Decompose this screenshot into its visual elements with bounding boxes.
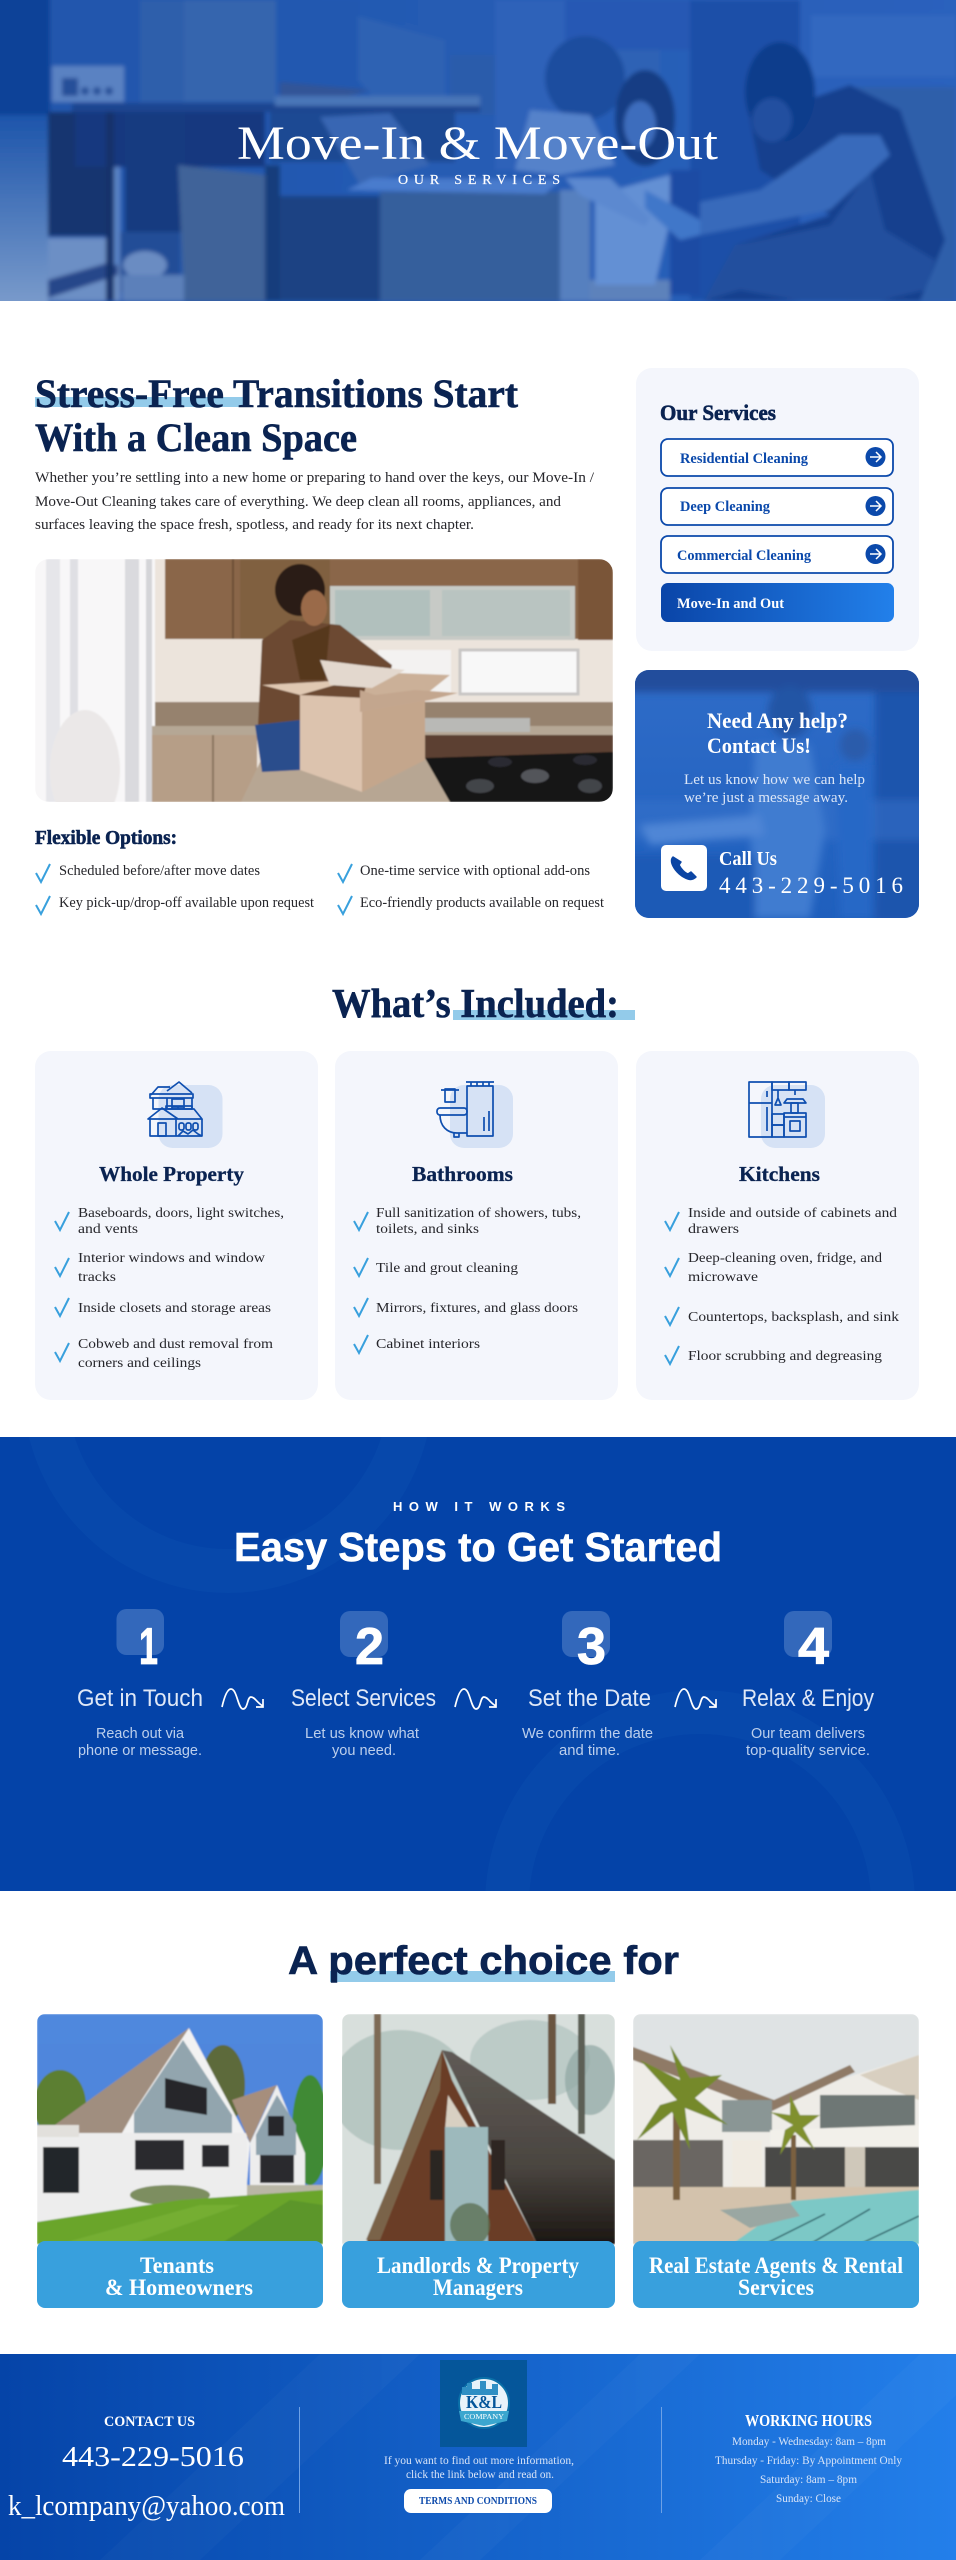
- working hours: Saturday: 8am – 8pm: [760, 2472, 858, 2486]
- item: cabinet interiors: Cabinet interiors: [376, 1337, 480, 1352]
- item: cabinets: Inside and outside of cabinets and: [688, 1206, 897, 1221]
- label bar: Tenants: [140, 2253, 214, 2278]
- included heading: What’s Included:: [332, 980, 619, 1026]
- panel: kitchens: [636, 1051, 919, 1400]
- option: one-time service: One-time service with optional add-ons: [360, 863, 590, 879]
- card: agents: [633, 2014, 919, 2308]
- panel: bathrooms: [335, 1051, 618, 1400]
- step 2: Let us know what: [305, 1726, 419, 1742]
- button: residential cleaning: Residential Cleaning: [680, 451, 808, 467]
- card title: Kitchens: [739, 1162, 820, 1186]
- footer info text: [384, 2453, 574, 2481]
- icon: bathroom: [437, 1082, 494, 1137]
- item: baseboards: [55, 1206, 284, 1237]
- intro heading: [35, 371, 519, 460]
- step 1: [77, 1609, 203, 1759]
- item: sanitization: [354, 1206, 581, 1237]
- intro body text: surfaces leaving the space fresh, spotless, and ready for its next chapter.: [35, 517, 474, 533]
- label bar: [37, 2241, 323, 2308]
- intro body text: Whether you’re settling into a new home or preparing to hand over the keys, our Move-In /: [35, 470, 595, 486]
- item: closets: Inside closets and storage areas: [78, 1301, 271, 1316]
- working hours: [715, 2411, 902, 2505]
- services heading: Our Services: [660, 400, 776, 425]
- panel: contact card: [635, 670, 919, 918]
- perfect choice heading: A perfect choice for: [288, 1939, 679, 1983]
- logo: COMPANY: [464, 2413, 504, 2421]
- label bar: Landlords & Property: [377, 2253, 579, 2278]
- button: commercial cleaning: Commercial Cleaning: [677, 548, 811, 564]
- item: tile: [354, 1258, 518, 1276]
- heading highlight: [330, 1971, 615, 1982]
- contact heading: Need Any help?: [707, 708, 848, 733]
- item: closets: [55, 1298, 271, 1316]
- step 2: [291, 1611, 436, 1759]
- card: tenants: [34, 2014, 328, 2308]
- options heading: Flexible Options:: [35, 827, 177, 849]
- working hours: WORKING HOURS: [745, 2411, 872, 2430]
- intro heading: With a Clean Space: [35, 415, 357, 460]
- item: oven: microwave: [688, 1270, 758, 1285]
- intro body text: [35, 470, 595, 533]
- option: eco-friendly: Eco-friendly products available on request: [360, 895, 604, 911]
- section heading: Easy Steps to Get Started: [234, 1524, 722, 1570]
- step 3: [522, 1611, 653, 1759]
- button: move-in and out: Move-In and Out: [677, 596, 784, 612]
- card: landlords: [330, 2014, 615, 2308]
- panel: whole property: [35, 1051, 318, 1400]
- card title: Bathrooms: [412, 1162, 513, 1186]
- label bar: & Homeowners: [105, 2275, 253, 2300]
- icon: phone: [661, 845, 707, 891]
- terms button: TERMS AND CONDITIONS: [419, 2495, 537, 2507]
- step 1: Reach out via: [96, 1726, 185, 1742]
- section eyebrow: HOW IT WORKS: [393, 1499, 565, 1514]
- item: sanitization: toilets, and sinks: [376, 1222, 479, 1237]
- step 1: Get in Touch: [77, 1685, 203, 1712]
- item: windows: Interior windows and window: [78, 1251, 266, 1266]
- step 4: Our team delivers: [751, 1726, 865, 1742]
- label bar: Real Estate Agents & Rental: [649, 2253, 903, 2278]
- item: floor: Floor scrubbing and degreasing: [688, 1349, 882, 1364]
- label bar: [633, 2241, 919, 2308]
- heading highlight: [453, 1010, 635, 1020]
- call us: 443-229-5016: [719, 873, 903, 898]
- step 2: 2: [355, 1618, 384, 1676]
- label bar: Services: [738, 2275, 814, 2300]
- button: deep cleaning: [661, 488, 893, 525]
- panel: how it works: [0, 1437, 956, 1891]
- contact text: [684, 772, 865, 806]
- panel: our services: [636, 368, 919, 651]
- button: residential cleaning: [661, 439, 893, 476]
- footer contact: 443-229-5016: [62, 2442, 244, 2473]
- arrow: step 3 to 4: [675, 1689, 716, 1709]
- footer info text: click the link below and read on.: [406, 2467, 554, 2481]
- step 1: phone or message.: [78, 1743, 202, 1759]
- perfect choice section: [34, 1939, 919, 2308]
- item: oven: [665, 1251, 882, 1285]
- working hours: Sunday: Close: [776, 2491, 841, 2505]
- label bar: Managers: [433, 2275, 523, 2300]
- terms button: [404, 2489, 552, 2513]
- hero banner: [0, 0, 956, 310]
- item: cabinet interiors: [354, 1335, 480, 1353]
- hero title: Move-In & Move-Out: [237, 117, 719, 170]
- arrow: step 1 to 2: [222, 1689, 263, 1709]
- contact heading: [707, 708, 848, 758]
- photo: suburban house: [34, 2014, 328, 2244]
- item: cobweb: Cobweb and dust removal from: [78, 1337, 273, 1352]
- step 2: Select Services: [291, 1685, 436, 1712]
- footer info text: If you want to find out more information,: [384, 2453, 574, 2467]
- footer contact: k_lcompany@yahoo.com: [8, 2491, 285, 2522]
- step 3: We confirm the date: [522, 1726, 653, 1742]
- working hours: Thursday - Friday: By Appointment Only: [715, 2453, 902, 2467]
- what's included section: [35, 980, 919, 1400]
- step 3: Set the Date: [528, 1685, 651, 1712]
- intro section: [35, 371, 595, 533]
- item: cabinets: drawers: [688, 1222, 739, 1237]
- label bar: [342, 2241, 615, 2308]
- intro heading: Stress-Free Transitions Start: [35, 371, 519, 416]
- item: oven: Deep-cleaning oven, fridge, and: [688, 1251, 882, 1266]
- logo: K&L: [466, 2392, 502, 2412]
- kitchen photo: [44, 559, 613, 802]
- button: deep cleaning: Deep Cleaning: [680, 499, 770, 515]
- item: cobweb: [55, 1337, 273, 1371]
- item: countertops: [665, 1307, 899, 1325]
- footer contact: [8, 2414, 285, 2522]
- photo: a-frame cabin: [330, 2014, 615, 2247]
- logo: [440, 2360, 527, 2447]
- item: cabinets: [665, 1206, 897, 1237]
- button: move-in and out: [661, 583, 894, 622]
- item: floor: [665, 1346, 882, 1364]
- contact heading: Contact Us!: [707, 733, 811, 758]
- card title: Whole Property: [99, 1162, 245, 1186]
- call us: Call Us: [719, 848, 777, 870]
- item: windows: [55, 1251, 266, 1285]
- footer: [0, 2354, 956, 2560]
- intro body text: Move-Out Cleaning takes care of everything. We deep clean all rooms, appliances, and: [35, 494, 562, 510]
- footer contact: CONTACT US: [104, 2414, 195, 2430]
- contact card photo: [635, 670, 919, 918]
- item: cobweb: corners and ceilings: [78, 1356, 201, 1371]
- call us: [719, 848, 903, 898]
- item: mirrors: [354, 1298, 578, 1316]
- contact text: Let us know how we can help: [684, 772, 865, 788]
- step 1: 1: [139, 1618, 158, 1676]
- step 4: 4: [798, 1618, 829, 1676]
- step 4: top-quality service.: [746, 1743, 870, 1759]
- step 2: you need.: [332, 1743, 396, 1759]
- option: key pick-up: Key pick-up/drop-off available upon request: [59, 895, 314, 911]
- step 4: [742, 1611, 874, 1759]
- item: mirrors: Mirrors, fixtures, and glass doors: [376, 1301, 578, 1316]
- icon: kitchen: [749, 1082, 806, 1137]
- contact text: we’re just a message away.: [684, 790, 848, 806]
- button: commercial cleaning: [661, 536, 893, 573]
- flexible options: [35, 827, 604, 914]
- item: tile: Tile and grout cleaning: [376, 1261, 518, 1276]
- step 3: 3: [577, 1618, 606, 1676]
- hero photo: [0, 0, 956, 310]
- option: scheduled: Scheduled before/after move dates: [59, 863, 260, 879]
- item: countertops: Countertops, backsplash, and sink: [688, 1310, 899, 1325]
- working hours: Monday - Wednesday: 8am – 8pm: [732, 2434, 887, 2448]
- item: windows: tracks: [78, 1270, 116, 1285]
- step 3: and time.: [559, 1743, 620, 1759]
- item: sanitization: Full sanitization of showers, tubs,: [376, 1206, 581, 1221]
- icon: house: [148, 1082, 202, 1136]
- step 4: Relax & Enjoy: [742, 1685, 874, 1712]
- arrow: step 2 to 3: [455, 1689, 496, 1709]
- hero subtitle: OUR SERVICES: [398, 173, 560, 188]
- item: baseboards: Baseboards, doors, light switches,: [78, 1206, 284, 1221]
- heading highlight: [35, 397, 243, 407]
- photo: modern villa with pool: [633, 2014, 919, 2244]
- item: baseboards: and vents: [78, 1222, 138, 1237]
